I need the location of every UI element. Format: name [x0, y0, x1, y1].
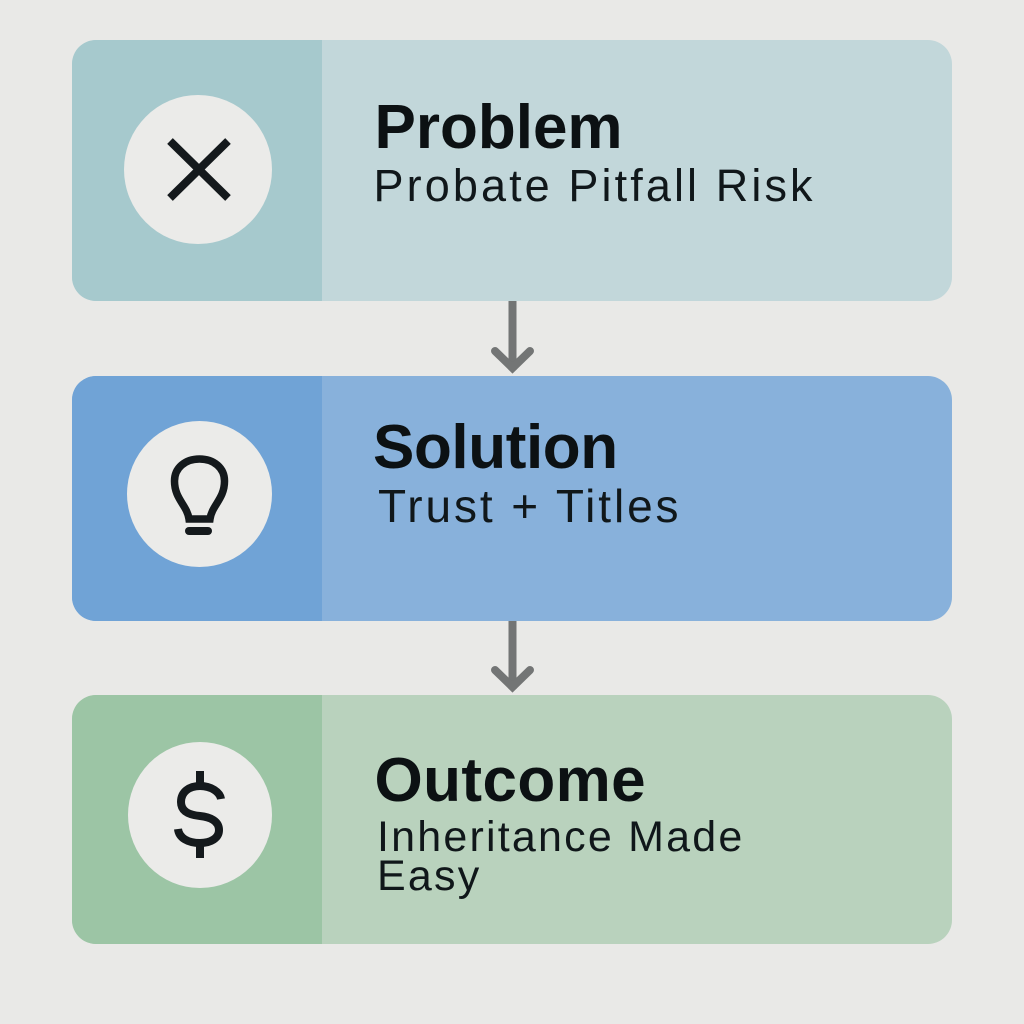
outcome subtitle [377, 813, 744, 900]
solution icon: light bulb in circle [127, 421, 272, 567]
problem subtitle: Probate Pitfall Risk [374, 160, 816, 210]
panel: problem [72, 40, 952, 301]
problem icon band [72, 40, 322, 301]
outcome subtitle: Easy [377, 852, 481, 900]
panel: outcome [72, 695, 952, 944]
outcome icon: dollar sign in circle [128, 742, 272, 888]
problem icon: X in circle [124, 95, 272, 244]
outcome subtitle: Inheritance Made [377, 813, 744, 861]
solution heading: Solution [373, 413, 618, 482]
outcome icon band [72, 695, 322, 944]
outcome heading: Outcome [374, 746, 646, 815]
solution icon band [72, 376, 322, 621]
panel: solution [72, 376, 952, 621]
solution subtitle: Trust + Titles [378, 480, 681, 532]
problem heading: Problem [374, 92, 623, 162]
